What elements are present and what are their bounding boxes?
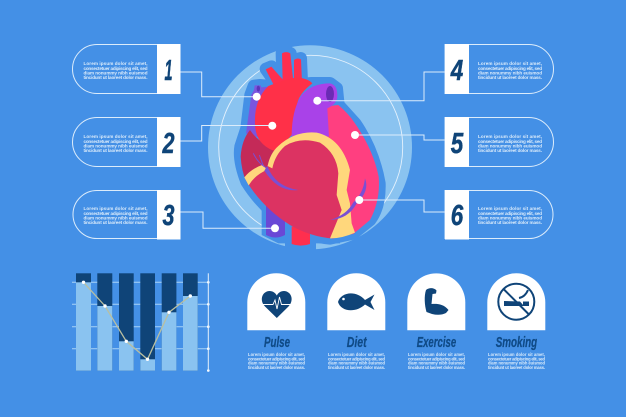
card: pulse: diam nonummy nibh euismod bbox=[248, 361, 305, 366]
card: diet: Lorem ipsum dolor sit amet, bbox=[328, 352, 385, 357]
connector lines bbox=[180, 72, 445, 228]
panel 2: Lorem ipsum dolor sit amet, bbox=[84, 134, 148, 139]
panel 5: tincidunt ut laoreet dolor mass. bbox=[478, 148, 542, 153]
panel 4: 4 bbox=[450, 55, 463, 87]
pulmonary artery bbox=[292, 83, 337, 137]
card: smoking: consectetuer adipiscing elit, sed bbox=[488, 356, 545, 361]
vena cava lower bbox=[266, 203, 285, 237]
panel 5: 5 bbox=[451, 128, 464, 160]
card: exercise: Lorem ipsum dolor sit amet, bbox=[408, 352, 465, 357]
panel 3: Lorem ipsum dolor sit amet, bbox=[84, 206, 148, 211]
heart marker dots bbox=[253, 93, 363, 232]
panel 3 bbox=[73, 190, 180, 240]
card: exercise: consectetuer adipiscing elit, sed bbox=[408, 356, 465, 361]
heart halo bbox=[240, 52, 379, 238]
icon: heart with pulse bbox=[262, 291, 292, 318]
panel 6: diam nonummy nibh euismod bbox=[478, 215, 542, 220]
panel 6: 6 bbox=[451, 200, 464, 232]
panel 1 bbox=[73, 44, 180, 94]
panel 6: Lorem ipsum dolor sit amet, bbox=[478, 206, 542, 211]
heart drawing bbox=[240, 52, 379, 255]
right atrium shade bbox=[241, 130, 278, 181]
vena cava upper bbox=[246, 85, 273, 140]
card: smoking: tincidunt ut laoreet dolor mass. bbox=[488, 365, 545, 370]
card: diet: consectetuer adipiscing elit, sed bbox=[328, 356, 385, 361]
card: diet bbox=[327, 273, 385, 370]
icon: no smoking bbox=[498, 284, 534, 320]
bar chart bbox=[72, 273, 210, 372]
panel 3: consectetuer adipiscing elit, sed bbox=[84, 211, 148, 216]
panel 4: consectetuer adipiscing elit, sed bbox=[478, 66, 542, 71]
card: smoking: diam nonummy nibh euismod bbox=[488, 361, 545, 366]
card: exercise: tincidunt ut laoreet dolor mass. bbox=[408, 365, 465, 370]
card: pulse: Lorem ipsum dolor sit amet, bbox=[248, 352, 305, 357]
pink left ventricle bbox=[317, 105, 379, 237]
card: pulse: tincidunt ut laoreet dolor mass. bbox=[248, 365, 305, 370]
descending aorta bbox=[292, 227, 310, 246]
panel 5: Lorem ipsum dolor sit amet, bbox=[478, 134, 542, 139]
panel 4 bbox=[445, 44, 553, 94]
card: diet: Diet bbox=[347, 334, 367, 351]
main ventricle bbox=[247, 137, 347, 239]
panel 3: diam nonummy nibh euismod bbox=[84, 215, 148, 220]
panel 1: tincidunt ut laoreet dolor mass. bbox=[84, 75, 148, 80]
panel 4: Lorem ipsum dolor sit amet, bbox=[478, 61, 542, 66]
panel 6: tincidunt ut laoreet dolor mass. bbox=[478, 220, 542, 225]
icon: fish bbox=[338, 293, 374, 310]
panel 4: diam nonummy nibh euismod bbox=[478, 70, 542, 75]
panel 6 bbox=[445, 190, 553, 240]
coronary veins bbox=[253, 153, 366, 220]
panel 5: consectetuer adipiscing elit, sed bbox=[478, 139, 542, 144]
panel 5: diam nonummy nibh euismod bbox=[478, 143, 542, 148]
card: smoking: Lorem ipsum dolor sit amet, bbox=[488, 352, 545, 357]
card: exercise: diam nonummy nibh euismod bbox=[408, 361, 465, 366]
card: smoking bbox=[487, 273, 545, 370]
card: pulse: Pulse bbox=[264, 334, 290, 351]
card: exercise bbox=[407, 273, 465, 370]
panel 1: diam nonummy nibh euismod bbox=[84, 70, 148, 75]
background circle bbox=[208, 45, 412, 249]
card: exercise: Exercise bbox=[417, 334, 456, 351]
card: smoking: Smoking bbox=[496, 334, 537, 351]
card: diet: diam nonummy nibh euismod bbox=[328, 361, 385, 366]
central heart illustration bbox=[208, 45, 412, 255]
panel 3: 3 bbox=[162, 200, 174, 232]
panel 2: tincidunt ut laoreet dolor mass. bbox=[84, 148, 148, 153]
aorta body bbox=[255, 77, 312, 151]
panel 2: diam nonummy nibh euismod bbox=[84, 143, 148, 148]
icon: flexed arm bbox=[425, 288, 448, 315]
panel 2: consectetuer adipiscing elit, sed bbox=[84, 139, 148, 144]
panel 2: 2 bbox=[162, 128, 174, 160]
aorta branches bbox=[266, 67, 285, 89]
panel 4: tincidunt ut laoreet dolor mass. bbox=[478, 75, 542, 80]
card: pulse: consectetuer adipiscing elit, sed bbox=[248, 356, 305, 361]
panel 1: consectetuer adipiscing elit, sed bbox=[84, 66, 148, 71]
panel 1: Lorem ipsum dolor sit amet, bbox=[84, 61, 148, 66]
panel 3: tincidunt ut laoreet dolor mass. bbox=[84, 220, 148, 225]
card: diet: tincidunt ut laoreet dolor mass. bbox=[328, 365, 385, 370]
panel 1: 1 bbox=[164, 55, 172, 87]
card: pulse bbox=[247, 273, 305, 370]
panel 5 bbox=[445, 117, 554, 167]
panel 6: consectetuer adipiscing elit, sed bbox=[478, 211, 542, 216]
panel 2 bbox=[72, 117, 180, 167]
white ring bbox=[219, 55, 403, 239]
yellow coronary band bbox=[244, 165, 267, 185]
